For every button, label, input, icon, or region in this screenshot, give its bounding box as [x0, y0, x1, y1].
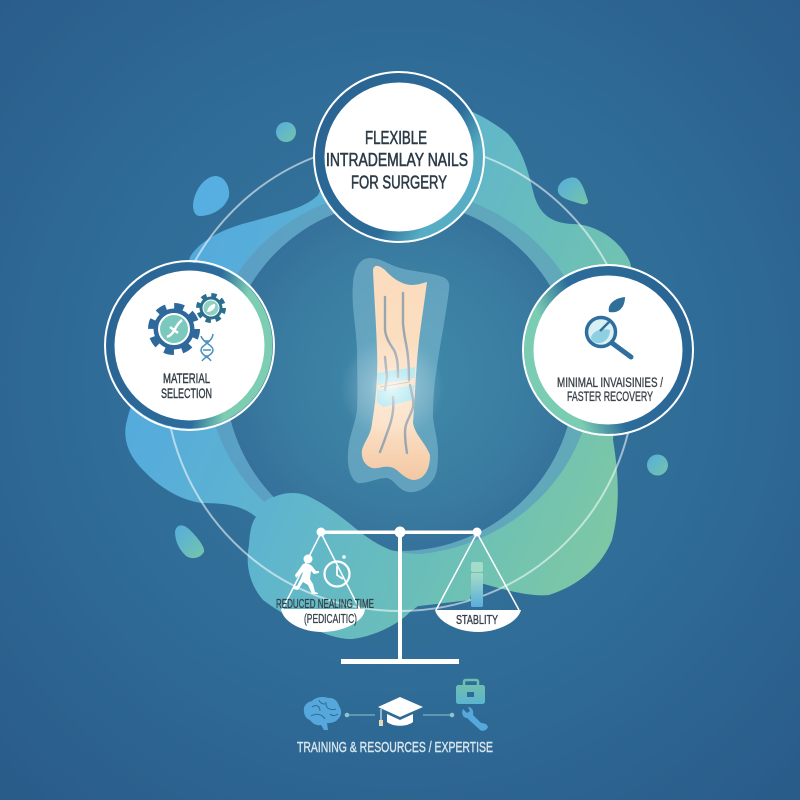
- nails: [380, 293, 413, 453]
- strings: [282, 533, 519, 610]
- crescent band around opening: [207, 189, 593, 555]
- title text: FOR SURGERY: [351, 172, 447, 192]
- node: material selection: [105, 261, 274, 430]
- right pan label: STABLITY: [456, 612, 498, 627]
- label: FASTER RECOVERY: [567, 389, 653, 404]
- bone halo: [348, 258, 449, 492]
- title text: [326, 128, 468, 192]
- left pan: [281, 609, 365, 632]
- icon: brain: [304, 697, 341, 730]
- title text: FLEXIBLE: [365, 128, 427, 148]
- fracture line: [380, 382, 410, 387]
- left pan label: (PEDICAITIC): [304, 611, 357, 626]
- icon: magnifier and leaf: [586, 297, 631, 357]
- floating droplets: [175, 122, 668, 558]
- left pan label: [276, 596, 374, 626]
- droplet: right: [558, 177, 588, 204]
- right pan: [435, 610, 521, 632]
- label: SELECTION: [161, 386, 212, 401]
- label: MATERIAL: [163, 371, 210, 386]
- icon: gears and DNA: [152, 296, 224, 361]
- bone shaft: [362, 266, 430, 480]
- droplet: lower left: [175, 525, 204, 558]
- droplet: right dot: [647, 454, 668, 476]
- inner disc: [225, 201, 575, 551]
- teal organic blob with circular opening: [125, 104, 632, 639]
- bottom training row: [297, 680, 493, 756]
- arrow right: [423, 713, 454, 717]
- icon: stability column: [471, 562, 483, 607]
- label: MINIMAL INVAISINIES /: [557, 375, 663, 390]
- left pan label: REDUCED NEALING TIME: [276, 596, 374, 611]
- fracture band: [377, 367, 415, 407]
- lower lobe overlapping opening: [255, 493, 477, 620]
- droplet: top dot: [276, 122, 296, 142]
- droplet: left: [193, 176, 229, 216]
- icon: runner and stopwatch: [293, 554, 350, 594]
- balance scale: [276, 526, 521, 664]
- icon: graduation cap: [378, 697, 423, 726]
- node: minimal invasiveness: [523, 265, 693, 435]
- arrow left: [345, 713, 375, 717]
- label: [161, 371, 212, 401]
- footer text: TRAINING & RESOURCES / EXPERTISE: [297, 740, 493, 756]
- beam and post: [316, 526, 482, 664]
- icon: wrench: [462, 707, 488, 731]
- thin white orbit ring: [165, 141, 635, 611]
- title text: INTRADEMLAY NAILS: [326, 150, 468, 170]
- label: [557, 375, 663, 404]
- glow: [340, 336, 444, 440]
- icon: toolbox: [456, 680, 485, 704]
- bone illustration: [340, 258, 449, 492]
- node: title: [314, 72, 484, 242]
